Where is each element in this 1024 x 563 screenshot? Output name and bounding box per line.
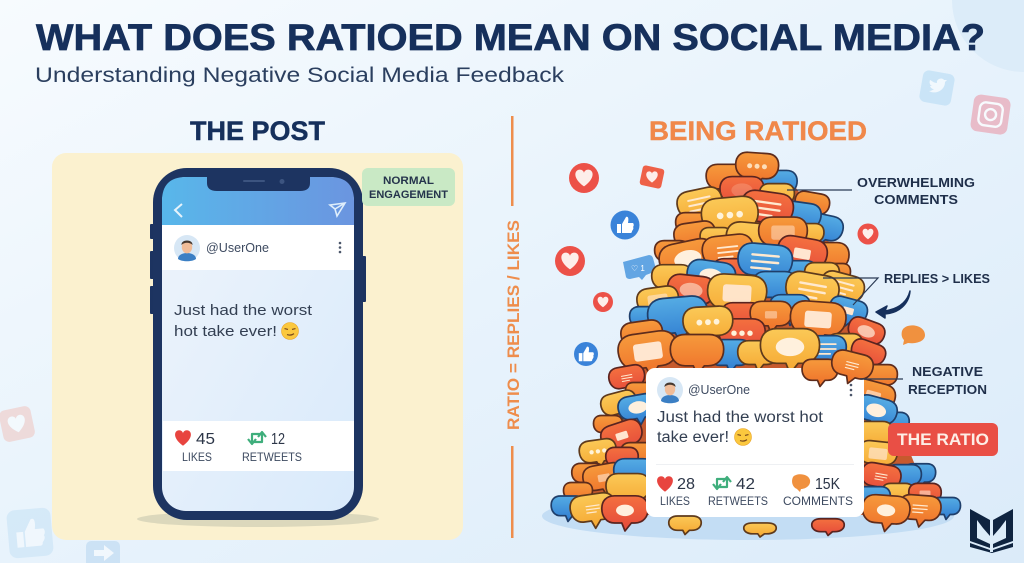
post card: ratioed: take ever! [657,429,729,446]
divider: ratio formula: RATIO = REPLIES / LIKES [504,220,523,430]
label: negative reception: NEGATIVE [912,365,983,379]
bubbles on card edge [802,348,876,389]
icon: faded heart tile [0,405,36,443]
post card: ratioed [646,368,864,517]
badge: the ratio: THE RATIO [897,430,989,449]
label: replies greater than likes [823,272,990,305]
engagement stats: LIKES [182,452,212,464]
badge: the ratio [888,423,998,456]
post text [174,302,313,340]
engagement stats: 45 [196,431,215,448]
label: overwhelming comments [787,176,975,207]
label: negative reception [860,365,987,397]
post card: ratioed: 28 [677,476,695,493]
bubbles below card [669,516,844,537]
icon: send [330,203,345,216]
subtitle: Understanding Negative Social Media Feedback [35,63,564,87]
badge: normal engagement: ENGAGEMENT [369,189,448,201]
label: negative reception: RECEPTION [908,383,987,397]
phone shadow [137,511,379,527]
icon: faded thumb tile [6,507,54,559]
post card: ratioed: 42 [736,476,755,493]
post card: ratioed: LIKES [660,496,690,508]
icon: faded share tile [86,541,120,563]
post text: Just had the worst [174,302,313,319]
icon: faded twitter tile [918,69,956,107]
label: overwhelming comments: COMMENTS [874,193,958,207]
label: replies greater than likes: REPLIES > LIKES [884,272,990,286]
heading: being ratioed: BEING RATIOED [649,116,867,146]
title: WHAT DOES RATIOED MEAN ON SOCIAL MEDIA? [36,17,985,58]
phone [150,168,366,520]
heading: the post: THE POST [190,116,326,146]
label: overwhelming comments: OVERWHELMING [857,176,975,190]
badge: normal engagement: NORMAL [383,175,434,187]
post header: @UserOne [206,241,269,255]
post card: ratioed: 15K [815,476,841,493]
comment pile [551,151,960,533]
post card: ratioed: Just had the worst hot [657,409,824,426]
engagement stats: RETWEETS [242,452,302,464]
ground shadow [542,492,954,540]
post card: ratioed: @UserOne [688,383,750,397]
icon: floating reactions [555,163,925,366]
icon: back chevron [175,204,182,217]
arrow: curved pointer [876,291,910,318]
panel: the post [52,153,463,540]
icon: faded instagram tile [970,94,1011,135]
post card: ratioed: RETWEETS [708,496,768,508]
logo [970,509,1013,553]
icon: floating reactions: ♡ 1 [631,264,645,273]
engagement stats: 12 [271,431,285,448]
post text: hot take ever! [174,323,277,340]
badge: normal engagement [362,168,455,206]
engagement stats [163,421,354,471]
post header [162,225,354,270]
post card: ratioed: COMMENTS [783,496,853,508]
